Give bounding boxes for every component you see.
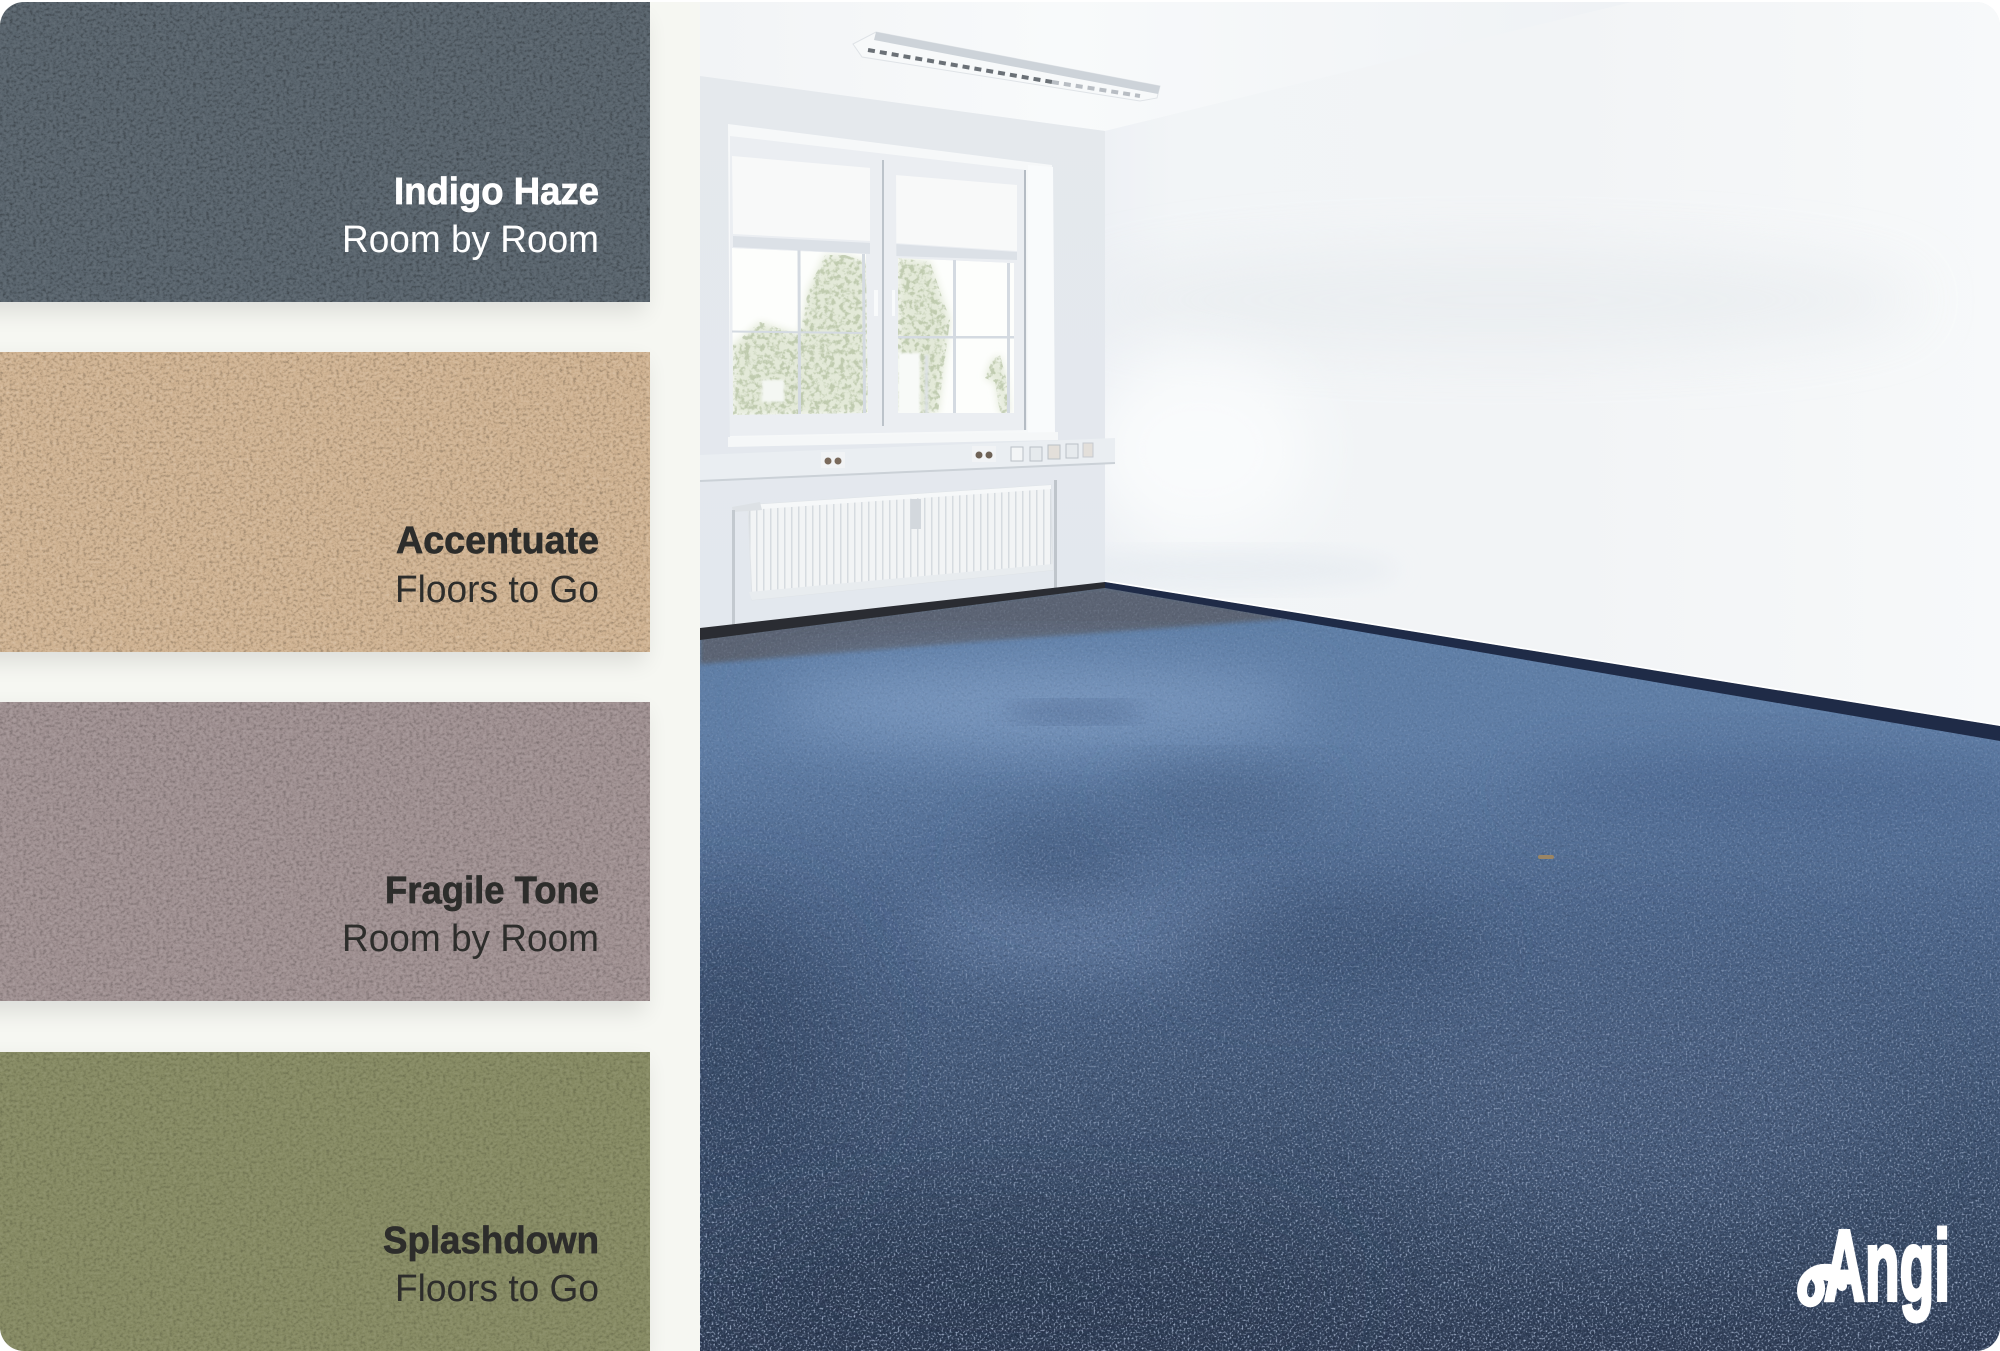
- window wall: [700, 76, 1105, 630]
- radiator: [732, 480, 1057, 632]
- swatch label: Splashdown: [384, 1225, 598, 1302]
- debris on carpet: [1538, 855, 1554, 859]
- swatch label: Indigo Haze: [342, 171, 599, 261]
- panel: swatch shadows: [0, 302, 648, 1017]
- swatch label: Indigo Haze: Indigo Haze: [394, 171, 599, 213]
- carpet light and dark patches: [620, 586, 2000, 1351]
- carpet floor: [620, 586, 2000, 1351]
- swatch label: Splashdown: Floors to Go: [395, 1268, 599, 1310]
- window sill and cable duct: [700, 432, 1115, 481]
- panel: room photograph: [620, 0, 2000, 1351]
- window: [728, 124, 1055, 444]
- window panes and trees outside: [730, 248, 1020, 420]
- right wall: [1134, 396, 1272, 506]
- panel: Indigo Haze swatch: [0, 0, 650, 302]
- panel: Fragile Tone swatch: [0, 702, 650, 1001]
- ceiling light fixture: [853, 32, 1160, 101]
- swatch label: Accentuate: Accentuate: [396, 520, 599, 562]
- panel: Accentuate swatch: [0, 352, 650, 652]
- window frame bars: [733, 160, 1026, 430]
- panel: Splashdown swatch: [0, 1052, 650, 1351]
- swatch label: Splashdown: Splashdown: [383, 1220, 599, 1262]
- swatch label: Indigo Haze: Room by Room: [342, 219, 599, 261]
- logo swash: [1802, 1269, 1842, 1302]
- carpet speckle: [700, 590, 2000, 1351]
- ceiling: [700, 0, 1640, 131]
- swatch label: Fragile Tone: Room by Room: [342, 918, 599, 960]
- window muntins: [732, 250, 1014, 414]
- skirting boards: [700, 581, 2000, 741]
- Angi logo: [1802, 1210, 1950, 1322]
- wall sockets: [821, 443, 1093, 468]
- swatch label: Accentuate: [396, 526, 598, 602]
- window blinds: [732, 156, 1017, 251]
- swatch label: Fragile Tone: [342, 870, 599, 960]
- swatch label: Accentuate: Floors to Go: [395, 569, 599, 611]
- swatch label: Fragile Tone: Fragile Tone: [385, 870, 599, 912]
